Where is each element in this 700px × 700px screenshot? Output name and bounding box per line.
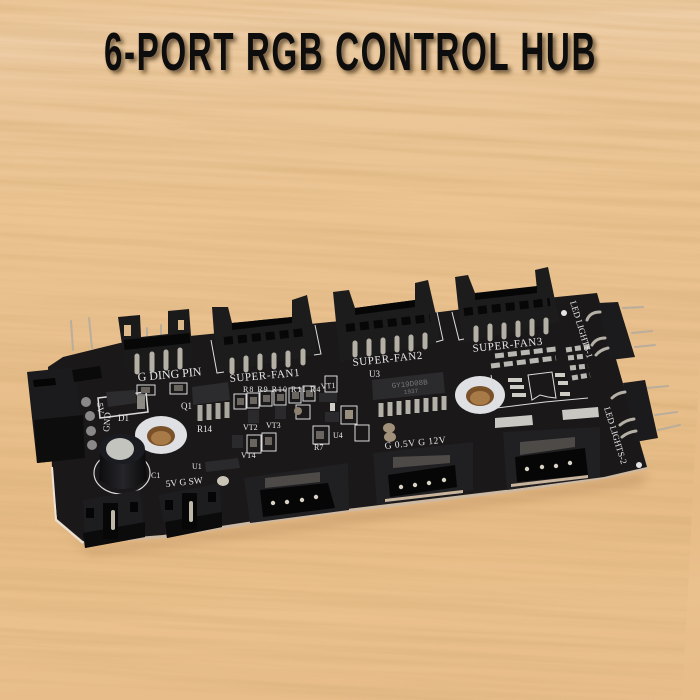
resistor arrays, centre: VT3 bbox=[266, 421, 281, 430]
lower left white board edge bbox=[52, 467, 83, 543]
IC Q1: R14 bbox=[197, 424, 213, 434]
bottom left 2-pin connector bbox=[83, 490, 145, 548]
IC U3: 1937 bbox=[403, 387, 419, 396]
label: super fan 3: SUPER-FAN3 bbox=[472, 336, 544, 355]
connector: super fan 1 bbox=[211, 295, 321, 385]
resistor arrays, centre: VT4 bbox=[241, 451, 256, 460]
RGB control hub circuit board bbox=[27, 267, 680, 555]
resistor arrays, centre: R8 R9 R10 R11 R4 bbox=[243, 385, 321, 394]
connector: ding pin header bbox=[71, 309, 202, 384]
label: 5V and GND: 5V bbox=[95, 402, 106, 415]
chip U1 bbox=[192, 458, 240, 486]
label: ding pin: G DING PIN bbox=[137, 364, 202, 384]
right washer bbox=[455, 376, 505, 414]
connector: super fan 3 bbox=[452, 267, 560, 355]
label: ground pin: GND bbox=[101, 411, 113, 432]
label: super fan 1: SUPER-FAN1 bbox=[229, 367, 301, 385]
bottom connector 2 bbox=[373, 442, 473, 505]
IC U3 bbox=[369, 369, 445, 417]
IC Q1: Q1 bbox=[181, 401, 192, 411]
resistor arrays, centre: R7 bbox=[314, 443, 323, 452]
label: LED lights 1: LED LIGHTS-1 bbox=[568, 300, 595, 359]
IC U3: U3 bbox=[369, 369, 380, 379]
resistor arrays, centre: VT2 bbox=[243, 423, 258, 432]
PCB body bbox=[48, 293, 647, 541]
capacitor bbox=[94, 434, 160, 494]
left washer bbox=[135, 416, 187, 454]
label: LED lights 2: LED LIGHTS-2 bbox=[602, 406, 629, 465]
diode D1 bbox=[98, 390, 148, 423]
resistor arrays, centre bbox=[137, 376, 396, 460]
right upper LED header bbox=[561, 300, 655, 360]
bottom left second 2-pin connector bbox=[158, 483, 222, 538]
right lower LED header bbox=[602, 380, 680, 468]
IC Q1 bbox=[181, 382, 230, 434]
resistor arrays, centre: VT1 bbox=[320, 381, 336, 391]
label: super fan 2: SUPER-FAN2 bbox=[352, 350, 424, 369]
SOIC footprint and passives, right bbox=[491, 346, 599, 428]
resistor arrays, centre: U4 bbox=[333, 431, 343, 440]
bottom connector 1 bbox=[244, 463, 349, 523]
IC U3: GY19D08B bbox=[391, 379, 429, 391]
left side connector bbox=[27, 366, 106, 463]
capacitor pair bbox=[383, 423, 395, 433]
capacitor: C1 bbox=[151, 471, 160, 480]
silkscreen: 5V label: 5V G SW bbox=[165, 476, 203, 490]
board cream edge bbox=[53, 455, 648, 544]
board shadow bbox=[60, 472, 650, 555]
bottom connector 3 bbox=[503, 427, 600, 490]
connector: super fan 2 bbox=[333, 280, 443, 369]
chip U1: U1 bbox=[192, 462, 202, 471]
voltage labels: G 0.5V G 12V bbox=[384, 436, 447, 452]
diode D1: D1 bbox=[118, 413, 129, 423]
